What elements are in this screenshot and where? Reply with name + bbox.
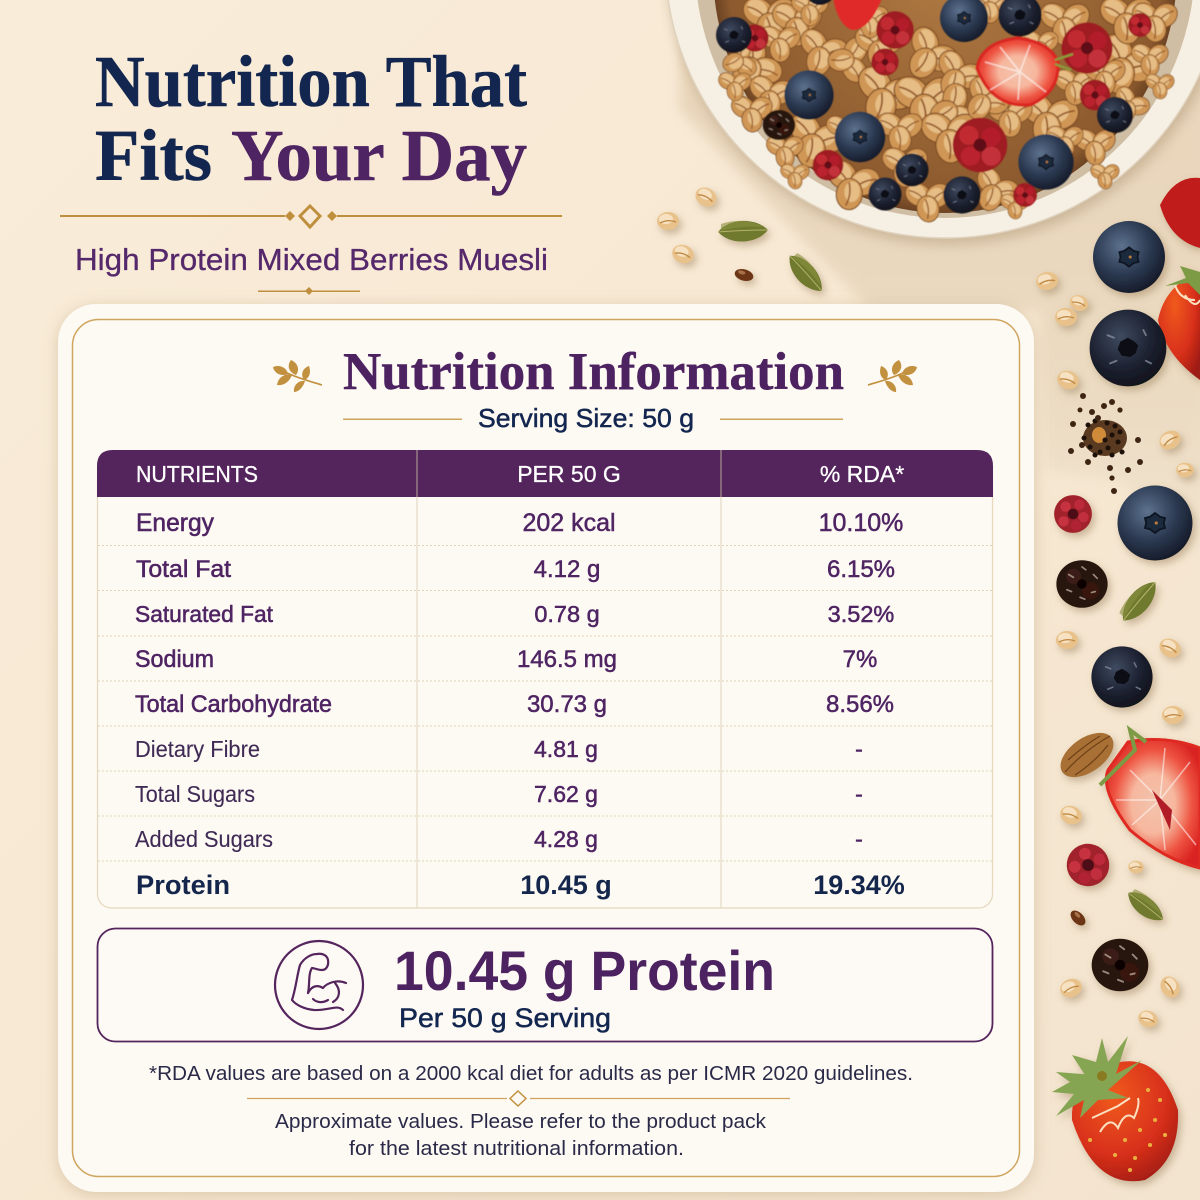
row: saturated fat: 3.52%: [828, 601, 894, 627]
protein callout: [98, 928, 992, 1042]
row: dietary fibre: [135, 736, 863, 762]
linen cloth under bowl: [680, 0, 1200, 570]
row: energy: 202 kcal: [522, 509, 616, 537]
row: total fat: [136, 556, 895, 583]
row: saturated fat: [135, 601, 894, 627]
title ornament: [60, 206, 562, 227]
row: protein: [136, 870, 905, 900]
disclaimer: [275, 1110, 767, 1160]
row: total fat: Total Fat: [136, 556, 231, 583]
row: energy: Energy: [136, 509, 214, 537]
callout figure: 10.45 g Protein: [394, 939, 775, 1002]
subtitle: High Protein Mixed Berries Muesli: [75, 242, 548, 277]
nutrition table: [97, 450, 993, 908]
scattered seeds near bowl: [657, 184, 828, 298]
row: sodium: 7%: [843, 646, 877, 673]
row: dietary fibre: 4.81 g: [534, 736, 598, 762]
row: added sugars: -: [855, 826, 863, 852]
RDA footnote: *RDA values are based on a 2000 kcal diet for adults as per ICMR 2020 guidelines.: [149, 1062, 913, 1085]
row: added sugars: 4.28 g: [534, 826, 598, 852]
row: sodium: Sodium: [135, 646, 214, 673]
row: added sugars: [135, 826, 863, 852]
table header: PER 50 G: [517, 461, 621, 487]
row: total carbohydrate: 30.73 g: [527, 691, 607, 718]
row: protein: Protein: [136, 870, 230, 900]
title: Your Day: [231, 115, 527, 196]
row: dietary fibre: -: [855, 736, 863, 762]
row: total sugars: 7.62 g: [534, 781, 598, 807]
title: Fits: [95, 115, 212, 196]
row: dietary fibre: Dietary Fibre: [135, 736, 260, 762]
row: saturated fat: Saturated Fat: [135, 601, 273, 627]
row: added sugars: Added Sugars: [135, 826, 273, 852]
row: total carbohydrate: 8.56%: [826, 691, 894, 718]
row: total sugars: -: [855, 781, 863, 807]
card heading: Nutrition Information: [343, 343, 844, 401]
disclaimer: for the latest nutritional information.: [349, 1137, 684, 1160]
row: total fat: 4.12 g: [534, 556, 600, 583]
disclaimer: Approximate values. Please refer to the product pack: [275, 1110, 767, 1133]
table header: NUTRIENTS: [136, 461, 258, 487]
row: sodium: [135, 646, 877, 673]
footnote ornament: [247, 1091, 790, 1106]
row: total carbohydrate: Total Carbohydrate: [135, 691, 332, 718]
row: saturated fat: 0.78 g: [534, 601, 600, 627]
bowl of muesli: [665, 0, 1200, 245]
row: energy: [136, 509, 903, 537]
row: total carbohydrate: [135, 691, 894, 718]
table header: % RDA*: [820, 461, 904, 487]
title: Nutrition That: [95, 41, 527, 122]
row: total sugars: Total Sugars: [135, 781, 255, 807]
ingredients along right edge: [1035, 178, 1200, 1181]
row: energy: 10.10%: [819, 509, 903, 537]
row: protein: 19.34%: [813, 870, 905, 900]
table header: [97, 450, 993, 497]
subtitle ornament: [258, 287, 360, 295]
icon: flexed arm: [275, 941, 363, 1029]
callout caption: Per 50 g Serving: [399, 1003, 611, 1033]
row: total fat: 6.15%: [827, 556, 895, 583]
right sprig: [868, 360, 917, 392]
panel: nutrition card: [58, 304, 1034, 1192]
chia seed pile: [1068, 393, 1143, 494]
row: sodium: 146.5 mg: [517, 646, 617, 673]
row: protein: 10.45 g: [520, 870, 612, 900]
row: total sugars: [135, 781, 863, 807]
serving size: Serving Size: 50 g: [478, 403, 694, 433]
title: [95, 41, 527, 196]
left sprig: [273, 360, 322, 392]
